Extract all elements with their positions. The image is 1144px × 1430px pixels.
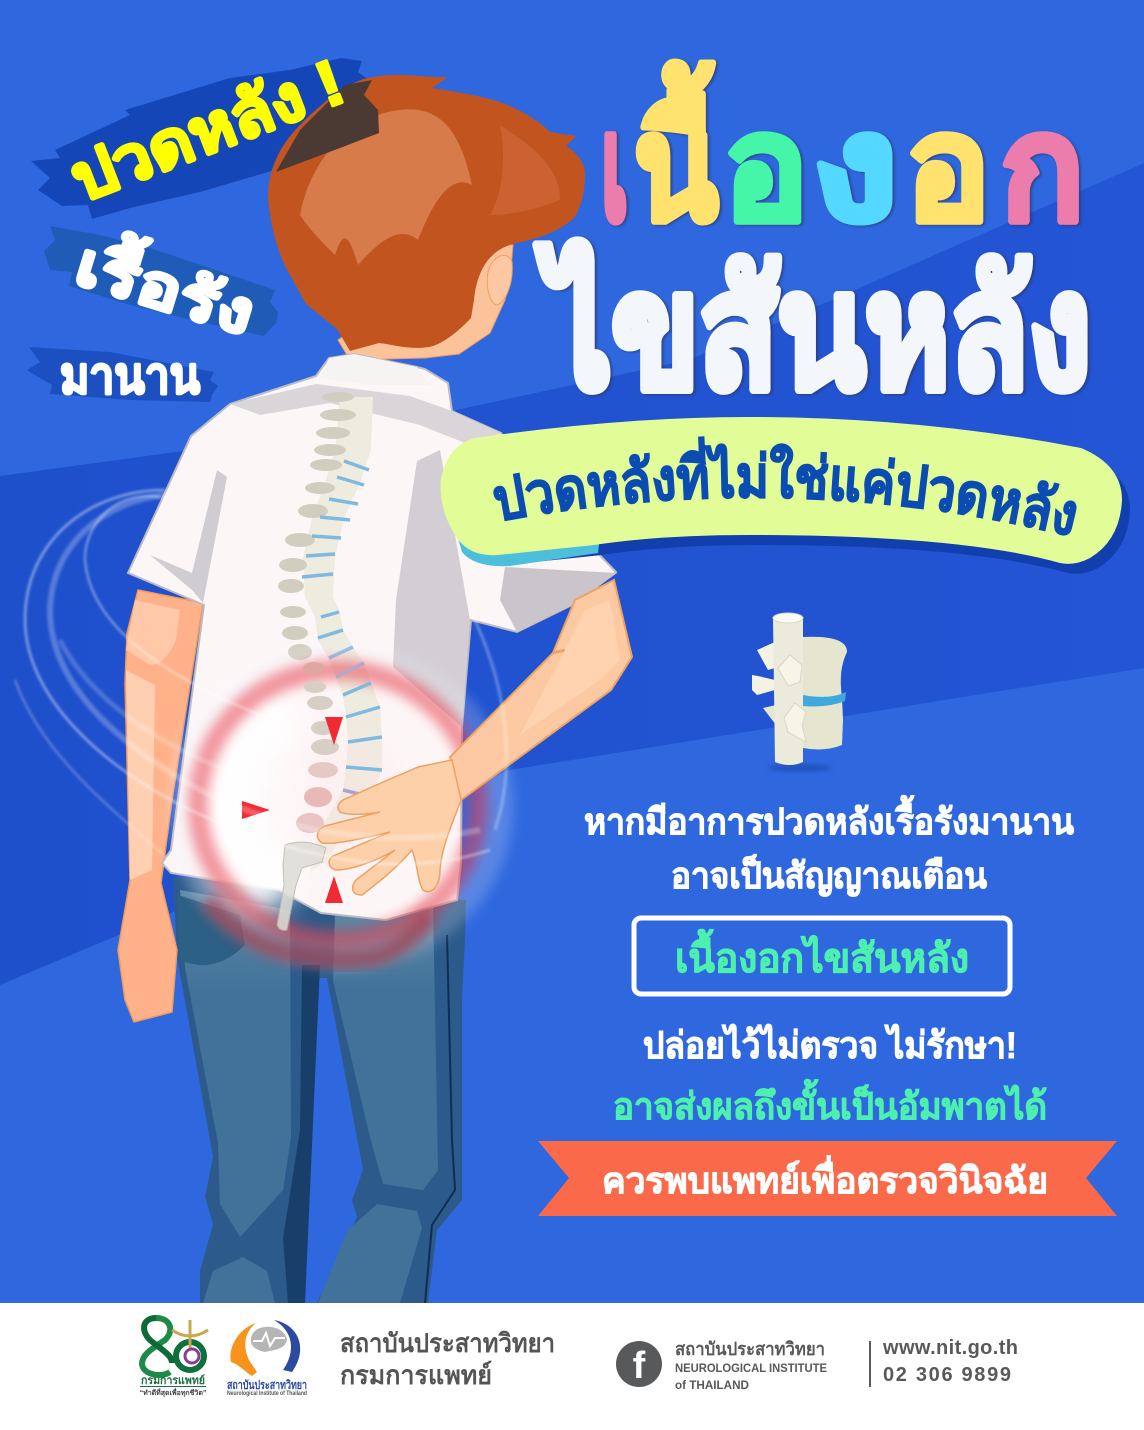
right arm bbox=[450, 580, 632, 800]
icon: facebook: f bbox=[633, 1345, 646, 1387]
brush overlay on hair bbox=[276, 80, 379, 172]
title: เนื้องอก bbox=[601, 61, 1084, 250]
neck and ear bbox=[338, 240, 513, 360]
spine model icon bbox=[752, 613, 847, 772]
brush tag: ปวดหลัง background bbox=[31, 58, 379, 219]
left arm bbox=[118, 590, 203, 1022]
body text: อาจเป็นสัญญาณเตือน bbox=[671, 853, 987, 897]
ear bbox=[487, 255, 512, 305]
ribbon call to action bbox=[538, 1141, 1117, 1216]
hair bbox=[268, 75, 585, 351]
facebook page name bbox=[675, 1339, 827, 1392]
title: เนื้องอก: อ bbox=[906, 87, 990, 250]
subtitle pill bbox=[440, 417, 1130, 574]
subtitle pill: ปวดหลังที่ไม่ใช่แค่ปวดหลัง bbox=[493, 436, 1076, 536]
lumbar bones in glow bbox=[296, 662, 382, 833]
logo: department of medical services 80 years bbox=[140, 1318, 208, 1397]
logo: department of medical services 80 years: กรมการแพทย์ bbox=[141, 1374, 205, 1387]
outlined highlight box bbox=[634, 918, 1010, 994]
sacrum bbox=[277, 842, 326, 930]
facebook page name: สถาบันประสาทวิทยา bbox=[675, 1339, 825, 1359]
body text bbox=[584, 795, 1074, 897]
brush tag: เรื้อรัง background bbox=[44, 226, 278, 336]
hand bbox=[317, 760, 461, 895]
warning text bbox=[613, 1023, 1047, 1127]
warning text: อาจส่งผลถึงขั้นเป็นอัมพาตได้ bbox=[613, 1079, 1047, 1127]
contact details bbox=[869, 1337, 1018, 1387]
title: เนื้องอก: ง bbox=[812, 87, 898, 250]
logo: neurological institute bbox=[227, 1320, 307, 1397]
person illustration bbox=[15, 75, 632, 1303]
organization name: สถาบันประสาทวิทยา bbox=[340, 1328, 555, 1358]
shirt bbox=[128, 354, 617, 920]
warning text: ปล่อยไว้ไม่ตรวจ ไม่รักษา! bbox=[643, 1023, 1017, 1066]
tag text: เรื้อรัง: เรื้อรัง bbox=[68, 220, 265, 348]
title: เนื้องอก: ก bbox=[1001, 87, 1084, 250]
contact details: 02 306 9899 bbox=[883, 1364, 1011, 1386]
outlined highlight box: เนื้องอกไขสันหลัง bbox=[675, 929, 969, 981]
brush tag: มานาน background bbox=[27, 347, 218, 402]
tag text: ปวดหลัง: ปวดหลัง ! bbox=[61, 46, 353, 215]
title: เนื้องอก: นื้ bbox=[634, 61, 718, 250]
red arrows bbox=[242, 717, 343, 903]
title: เนื้องอก: อ bbox=[724, 87, 808, 250]
body text: หากมีอาการปวดหลังเรื้อรังมานาน bbox=[584, 795, 1074, 842]
icon: facebook bbox=[616, 1341, 662, 1387]
tag text: มานาน: มานาน bbox=[60, 348, 200, 404]
organization name: กรมการแพทย์ bbox=[340, 1360, 492, 1390]
logo: neurological institute: Neurological Institute of Thailand bbox=[227, 1391, 307, 1397]
logo: neurological institute: สถาบันประสาทวิทยา bbox=[227, 1378, 307, 1392]
footer bbox=[0, 1303, 1144, 1430]
logo: department of medical services 80 years: “ทำดีที่สุดเพื่อทุกชีวิต” bbox=[140, 1387, 206, 1397]
organization name bbox=[340, 1328, 555, 1390]
facebook page name: NEUROLOGICAL INSTITUTE bbox=[675, 1361, 827, 1375]
spine bbox=[278, 392, 382, 872]
contact details: www.nit.go.th bbox=[882, 1337, 1018, 1359]
title: เนื้องอก: เ bbox=[601, 87, 628, 250]
motion swirl lines bbox=[15, 490, 506, 864]
facebook page name: of THAILAND bbox=[675, 1378, 749, 1392]
jeans bbox=[173, 877, 466, 1303]
ribbon call to action: ควรพบแพทย์เพื่อตรวจวินิจฉัย bbox=[602, 1155, 1048, 1201]
pain glow ring bbox=[182, 659, 498, 960]
